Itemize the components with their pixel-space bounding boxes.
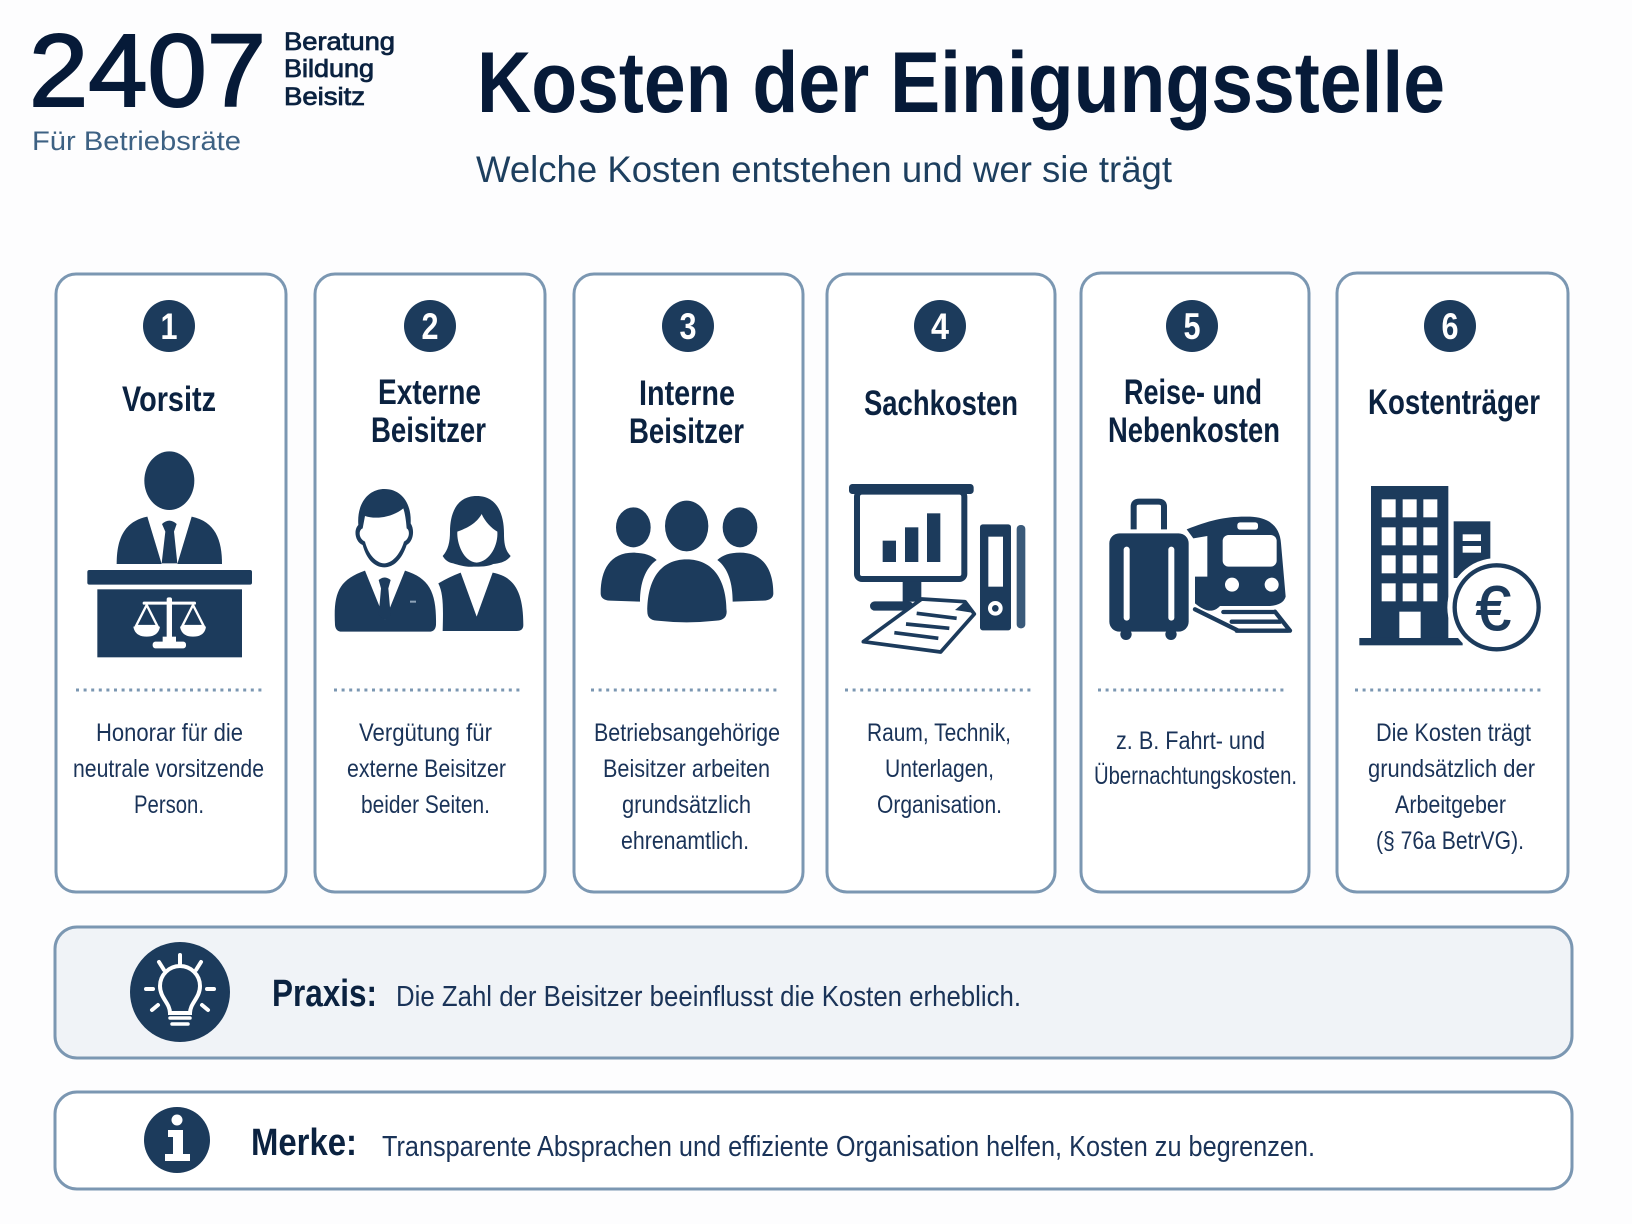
- icon: light bulb: [130, 942, 230, 1042]
- text block: Vorsitz: [73, 719, 264, 819]
- text block: Sachkosten: Unterlagen,: [885, 755, 994, 783]
- logo tagline: Beisitz: [284, 83, 365, 111]
- heading: Vorsitz: Vorsitz: [122, 380, 216, 419]
- icon: office building and euro coin: [1359, 486, 1546, 657]
- logo tagline: [284, 28, 395, 111]
- callout: Praxis: [55, 927, 1572, 1058]
- text block: Kostenträger: grundsätzlich der: [1368, 755, 1535, 783]
- panel: Externe Beisitzer: [315, 274, 545, 892]
- text block: Sachkosten: Organisation.: [877, 791, 1002, 819]
- text block: Externe Beisitzer: [347, 719, 506, 819]
- label: Praxis: Praxis:: [272, 973, 377, 1015]
- logo subline: Für Betriebsräte: [32, 126, 241, 156]
- number badge 5: 5: [1184, 306, 1200, 347]
- number badge 6: [1424, 300, 1476, 352]
- text block: Kostenträger: Die Kosten trägt: [1376, 719, 1531, 747]
- text block: Vorsitz: Honorar für die: [96, 719, 243, 747]
- number badge 2: 2: [422, 306, 438, 347]
- heading: Kostenträger: Kostenträger: [1368, 383, 1540, 422]
- text block: Interne Beisitzer: Beisitzer arbeiten: [603, 755, 770, 783]
- logo tagline: Bildung: [284, 55, 374, 83]
- text block: Sachkosten: Raum, Technik,: [867, 719, 1011, 747]
- number badge 2: [404, 300, 456, 352]
- heading: Externe Beisitzer: Externe: [378, 373, 481, 412]
- heading: Sachkosten: Sachkosten: [864, 384, 1018, 423]
- icon: presentation screen, document and binder: [849, 484, 1025, 652]
- text block: Sachkosten: [867, 719, 1011, 819]
- panel: Sachkosten: [827, 274, 1055, 892]
- text block: Interne Beisitzer: Betriebsangehörige: [594, 719, 780, 747]
- number badge 3: 3: [680, 306, 696, 347]
- icon: chair at desk with scales: [87, 451, 252, 657]
- heading: Reise- und Nebenkosten: Reise- und: [1124, 373, 1262, 412]
- text block: Interne Beisitzer: grundsätzlich: [622, 791, 751, 819]
- panel: Vorsitz: [56, 274, 286, 892]
- text: Merke note: Transparente Absprachen und effiziente Organisation helfen, Kosten zu begrenzen.: [382, 1131, 1315, 1163]
- heading: Interne Beisitzer: Interne: [639, 374, 735, 413]
- icon: man and woman: [335, 489, 523, 632]
- text block: Kostenträger: Arbeitgeber: [1395, 791, 1506, 819]
- number badge 6: 6: [1442, 306, 1458, 347]
- panel: Kostenträger: [1337, 273, 1568, 892]
- heading: Reise- und Nebenkosten: [1108, 373, 1280, 450]
- heading: Reise- und Nebenkosten: Nebenkosten: [1108, 411, 1280, 450]
- heading: Externe Beisitzer: Beisitzer: [371, 411, 486, 450]
- number badge 1: 1: [160, 306, 178, 347]
- text block: Externe Beisitzer: beider Seiten.: [361, 791, 490, 819]
- text block: Externe Beisitzer: externe Beisitzer: [347, 755, 506, 783]
- text: Praxis note: Die Zahl der Beisitzer beeinflusst die Kosten erheblich.: [396, 981, 1021, 1013]
- logo tagline: Beratung: [284, 28, 395, 56]
- heading: Interne Beisitzer: [629, 374, 744, 451]
- number badge 3: [662, 300, 714, 352]
- text block: Kostenträger: [1368, 719, 1535, 855]
- number badge 4: [914, 300, 966, 352]
- text block: Interne Beisitzer: ehrenamtlich.: [621, 827, 749, 855]
- number badge 1: [143, 300, 195, 352]
- icon: suitcase and train: [1109, 502, 1290, 640]
- text block: Reise- und Nebenkosten: [1094, 727, 1297, 790]
- text block: Vorsitz: neutrale vorsitzende: [73, 755, 264, 783]
- panel: Reise- und Nebenkosten: [1081, 273, 1309, 892]
- icon: office building and euro coin: €: [1476, 574, 1511, 644]
- label: Merke: Merke:: [251, 1122, 357, 1164]
- text block: Kostenträger: (§ 76a BetrVG).: [1376, 827, 1524, 855]
- panel: Interne Beisitzer: [574, 274, 803, 892]
- heading: Interne Beisitzer: Beisitzer: [629, 412, 744, 451]
- text block: Externe Beisitzer: Vergütung für: [359, 719, 492, 747]
- text block: Reise- und Nebenkosten: z. B. Fahrt- und: [1116, 727, 1265, 755]
- logo: [29, 13, 395, 156]
- subtitle: Welche Kosten entstehen und wer sie trägt: [476, 149, 1173, 190]
- number badge 5: [1166, 300, 1218, 352]
- heading: Externe Beisitzer: [371, 373, 486, 450]
- text block: Interne Beisitzer: [594, 719, 780, 855]
- text block: Reise- und Nebenkosten: Übernachtungskosten.: [1094, 762, 1297, 790]
- title: Kosten der Einigungsstelle: [477, 35, 1445, 131]
- icon: info: [144, 1107, 210, 1173]
- icon: group of three people: [601, 501, 773, 622]
- text block: Vorsitz: Person.: [134, 791, 204, 819]
- number badge 4: 4: [931, 306, 949, 347]
- logo number: 2407: [29, 13, 266, 128]
- callout: Merke: [55, 1092, 1572, 1189]
